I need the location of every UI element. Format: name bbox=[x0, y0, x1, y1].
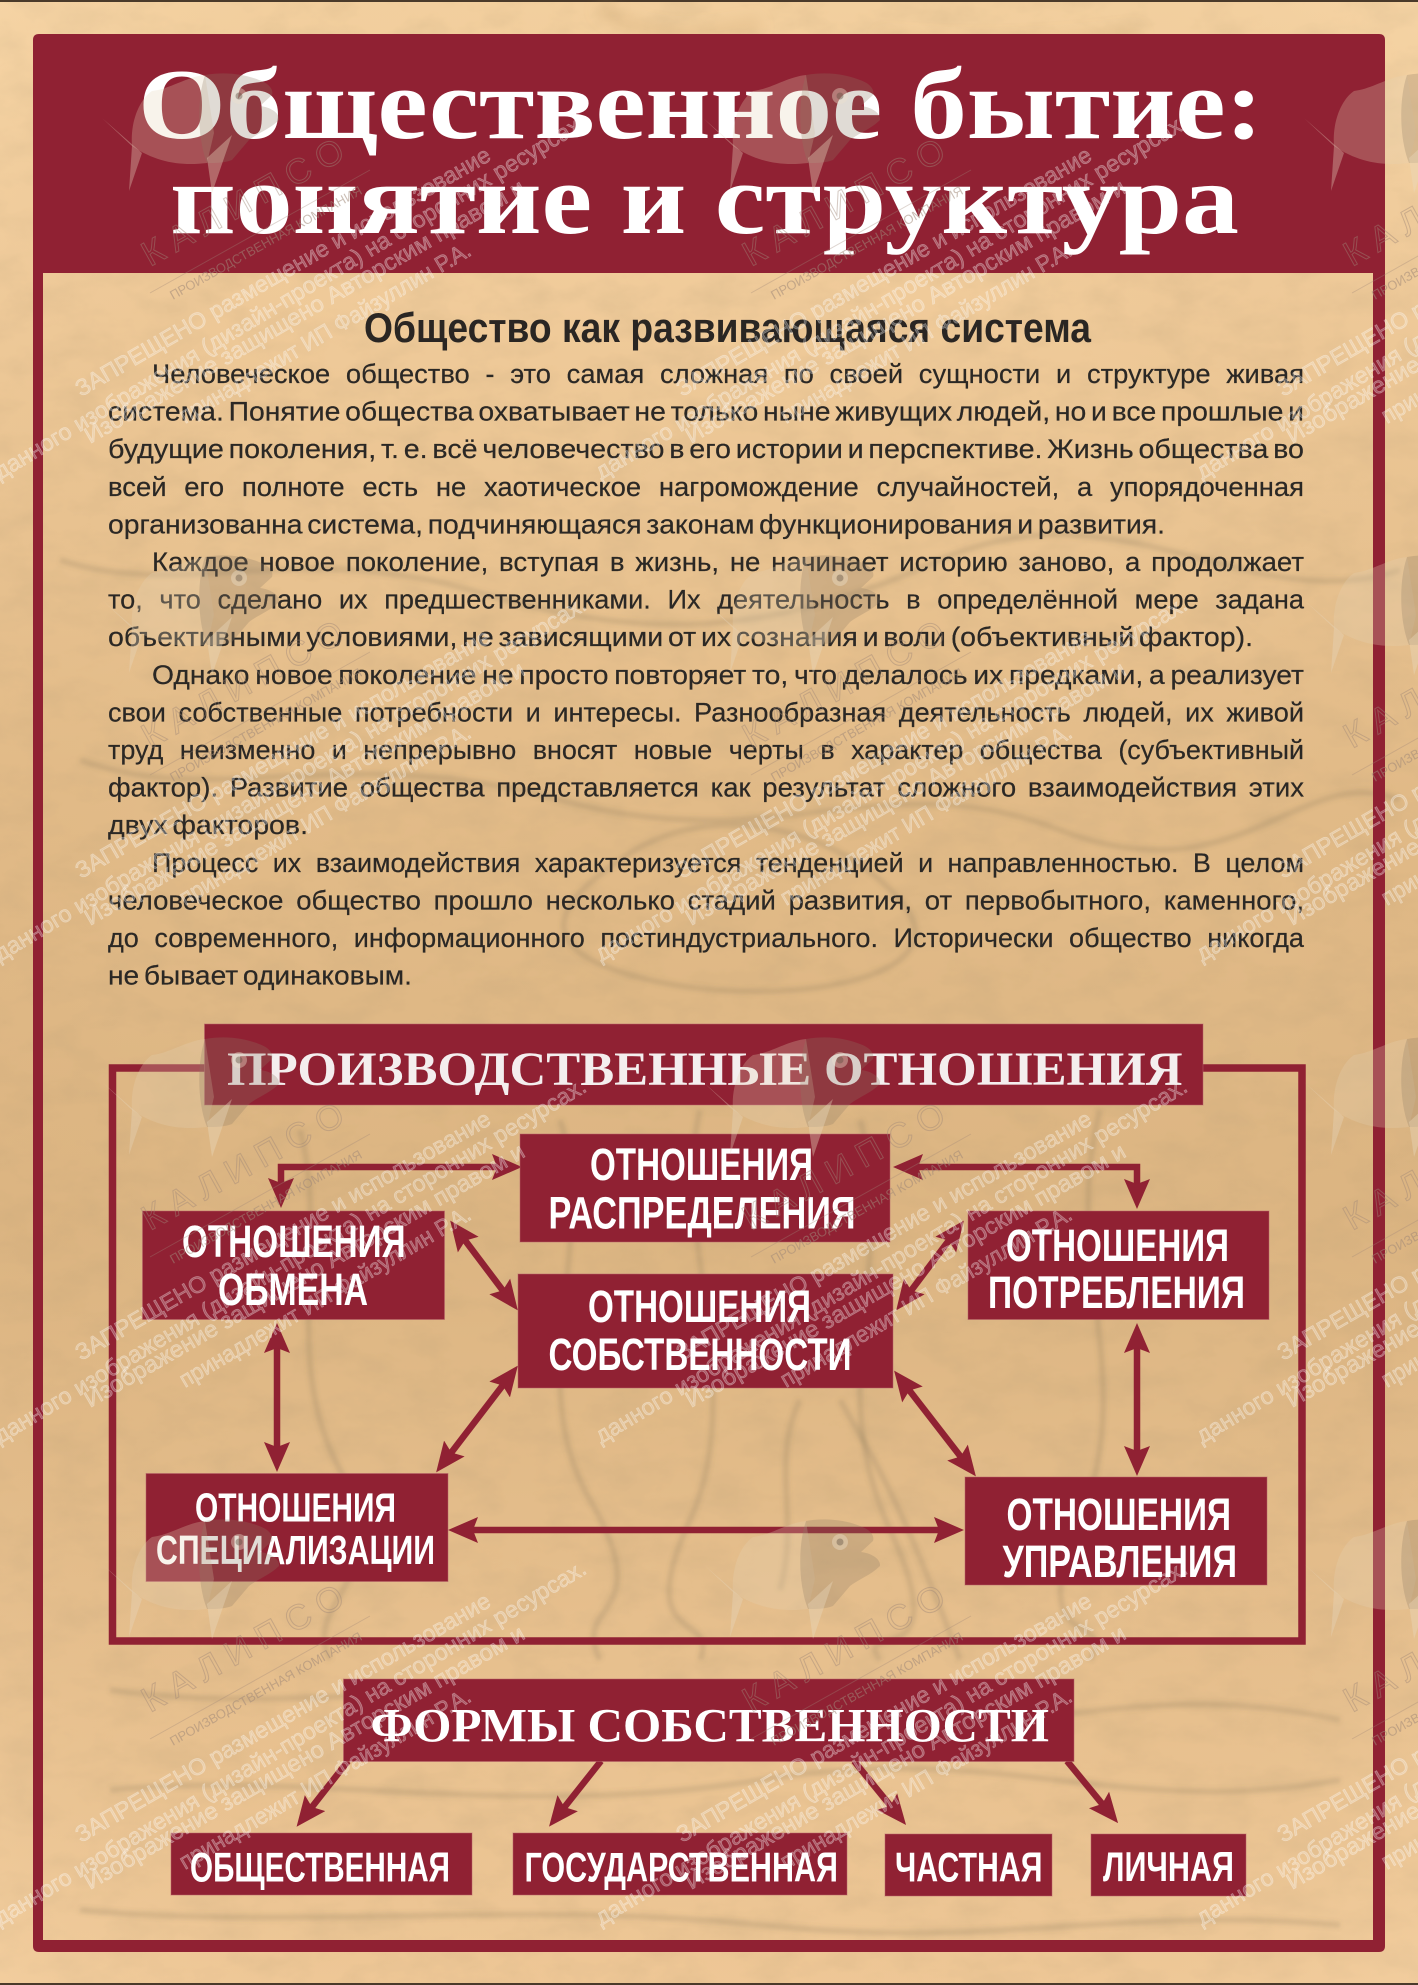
watermark overlay: К А Л И П С О bbox=[736, 613, 952, 756]
box: private: ЧАСТНАЯ bbox=[895, 1844, 1042, 1890]
watermark overlay: данного изображения (дизайн-проекта) на сторонних ресурсах. bbox=[590, 109, 1192, 484]
watermark overlay: данного изображения (дизайн-проекта) на сторонних ресурсах. bbox=[0, 109, 591, 484]
body text: объективными условиями, не зависящими от их сознания и воли (объективный фактор). bbox=[108, 622, 1253, 652]
title: Общественное бытие: bbox=[138, 48, 1263, 160]
title: понятие и структура bbox=[170, 143, 1239, 255]
arrow: consumption to management bbox=[1134, 1331, 1140, 1468]
watermark overlay: К А Л И П С О bbox=[135, 1577, 351, 1720]
watermark overlay: данного изображения (дизайн-проекта) на сторонних ресурсах. bbox=[0, 1073, 591, 1448]
watermark overlay: Изображение защищено Авторским правом и bbox=[680, 1138, 1130, 1412]
arrow: consumption to ownership bbox=[901, 1227, 959, 1304]
watermark overlay: К А Л И П С О bbox=[135, 131, 351, 274]
body text: до современного, информационного постиндустриального. Исторически общество никогда bbox=[108, 923, 1305, 953]
watermark overlay: ПРОИЗВОДСТВЕННАЯ КОМПАНИЯ bbox=[167, 1147, 365, 1267]
box: state: ГОСУДАРСТВЕННАЯ bbox=[524, 1844, 838, 1890]
watermark overlay: ЗАПРЕЩЕНО размещение и использование bbox=[672, 623, 1096, 883]
watermark overlay: принадлежит ИП Файзуллин Р.А. bbox=[775, 236, 1076, 428]
heading: production relations: ПРОИЗВОДСТВЕННЫЕ ОТНОШЕНИЯ bbox=[227, 1043, 1182, 1096]
box: specialization relations: СПЕЦИАЛИЗАЦИИ bbox=[156, 1527, 435, 1573]
heading: production relations bbox=[204, 1024, 1203, 1105]
watermark overlay: принадлежит ИП Файзуллин Р.А. bbox=[775, 1682, 1076, 1874]
watermark overlay: ЗАПРЕЩЕНО размещение и использование bbox=[70, 141, 495, 401]
watermark overlay: К А Л И П С О bbox=[135, 613, 351, 756]
watermark overlay: ПРОИЗВОДСТВЕННАЯ КОМПАНИЯ bbox=[768, 183, 966, 303]
watermark overlay: ПРОИЗВОДСТВЕННАЯ КОМПАНИЯ bbox=[167, 665, 365, 785]
box: consumption relations bbox=[968, 1211, 1269, 1320]
box: specialization relations: ОТНОШЕНИЯ bbox=[195, 1484, 396, 1530]
watermark overlay: принадлежит ИП Файзуллин Р.А. bbox=[775, 1200, 1076, 1392]
box: distribution relations bbox=[520, 1134, 890, 1242]
watermark overlay: ЗАПРЕЩЕНО размещение и использование bbox=[70, 623, 495, 883]
box: distribution relations: РАСПРЕДЕЛЕНИЯ bbox=[548, 1188, 856, 1238]
body text: не бывает одинаковым. bbox=[108, 961, 412, 991]
watermark overlay: принадлежит ИП Файзуллин Р.А. bbox=[174, 718, 475, 910]
box: management relations: ОТНОШЕНИЯ bbox=[1006, 1489, 1231, 1540]
arrow: distribution to consumption bbox=[901, 1167, 1137, 1201]
watermark overlay: принадлежит ИП Файзуллин Р.А. bbox=[174, 1200, 475, 1392]
body text: труд неизменно и непрерывно вносят новые черты в характер общества (субъективный bbox=[108, 735, 1304, 765]
section heading: Общество как развивающаяся система bbox=[364, 304, 1092, 351]
body text: то, что сделано их предшественниками. Их деятельность в определённой мере задана bbox=[108, 585, 1305, 615]
box: consumption relations: ОТНОШЕНИЯ bbox=[1006, 1220, 1229, 1271]
watermark overlay: принадлежит ИП Файзуллин Р.А. bbox=[775, 718, 1076, 910]
watermark overlay: ЗАПРЕЩЕНО размещение и использование bbox=[672, 1105, 1096, 1365]
box: distribution relations: ОТНОШЕНИЯ bbox=[590, 1139, 813, 1190]
body text: всей его полноте есть не хаотическое нагромождение случайностей, а упорядоченная bbox=[108, 472, 1304, 502]
box: management relations: УПРАВЛЕНИЯ bbox=[1002, 1536, 1237, 1587]
watermark overlay: данного изображения (дизайн-проекта) на сторонних ресурсах. bbox=[590, 1073, 1192, 1448]
watermark overlay: ЗАПРЕЩЕНО размещение и использование bbox=[672, 141, 1096, 401]
box: exchange relations bbox=[142, 1211, 444, 1320]
watermark overlay: К А Л И П С О bbox=[736, 1095, 952, 1238]
box: exchange relations: ОБМЕНА bbox=[218, 1264, 368, 1315]
watermark overlay: данного изображения (дизайн-проекта) на сторонних ресурсах. bbox=[590, 591, 1192, 966]
arrow: exchange to ownership bbox=[455, 1227, 513, 1304]
watermark overlay: ЗАПРЕЩЕНО размещение и использование bbox=[672, 1587, 1096, 1847]
box: ownership relations bbox=[518, 1274, 893, 1388]
watermark overlay: данного изображения (дизайн-проекта) на сторонних ресурсах. bbox=[0, 1555, 591, 1930]
body text bbox=[108, 359, 1305, 991]
box: management relations bbox=[965, 1477, 1267, 1587]
watermark overlay: Изображение защищено Авторским правом и bbox=[680, 656, 1130, 930]
box: specialization relations bbox=[146, 1474, 448, 1582]
watermark overlay: данного изображения (дизайн-проекта) на сторонних ресурсах. bbox=[590, 1555, 1192, 1930]
watermark overlay: Изображение защищено Авторским правом и bbox=[80, 656, 529, 930]
watermark overlay: ПРОИЗВОДСТВЕННАЯ КОМПАНИЯ bbox=[167, 1629, 365, 1749]
body text: Каждое новое поколение, вступая в жизнь, не начинает историю заново, а продолжает bbox=[152, 547, 1304, 577]
arrow: forms to public bbox=[302, 1761, 348, 1820]
arrow: ownership to management bbox=[899, 1377, 971, 1470]
watermark overlay: Изображение защищено Авторским правом и bbox=[80, 174, 529, 448]
arrow: specialization to management bbox=[456, 1527, 956, 1533]
arrow: ownership to specialization bbox=[441, 1372, 513, 1466]
box: consumption relations: ПОТРЕБЛЕНИЯ bbox=[988, 1267, 1245, 1318]
watermark overlay: Изображение защищено Авторским правом и bbox=[680, 1620, 1130, 1894]
arrow: distribution to exchange bbox=[281, 1167, 514, 1200]
watermark overlay: принадлежит ИП Файзуллин Р.А. bbox=[174, 236, 475, 428]
box: public: ОБЩЕСТВЕННАЯ bbox=[190, 1844, 450, 1890]
heading: forms of ownership: ФОРМЫ СОБСТВЕННОСТИ bbox=[370, 1700, 1049, 1752]
watermark overlay: Изображение защищено Авторским правом и bbox=[680, 174, 1130, 448]
watermark overlay: данного изображения (дизайн-проекта) на сторонних ресурсах. bbox=[0, 591, 591, 966]
watermark overlay: ПРОИЗВОДСТВЕННАЯ КОМПАНИЯ bbox=[768, 1147, 966, 1267]
body text: двух факторов. bbox=[108, 810, 308, 840]
watermark overlay: Изображение защищено Авторским правом и bbox=[80, 1138, 529, 1412]
body text: фактор). Развитие общества представляется как результат сложного взаимодействия этих bbox=[108, 773, 1304, 803]
body text: свои собственные потребности и интересы. Разнообразная деятельность людей, их живой bbox=[108, 697, 1304, 727]
panel: production relations frame bbox=[112, 1068, 1302, 1641]
box: exchange relations: ОТНОШЕНИЯ bbox=[182, 1216, 406, 1267]
arrow: forms to state bbox=[554, 1761, 601, 1820]
arrow: forms to personal bbox=[1067, 1761, 1113, 1817]
body text: человеческое общество прошло несколько стадий развития, от первобытного, каменного, bbox=[108, 885, 1304, 915]
watermark overlay: Изображение защищено Авторским правом и bbox=[80, 1620, 529, 1894]
body text: будущие поколения, т. е. всё человечество в его истории и перспективе. Жизнь общества во bbox=[108, 434, 1304, 464]
watermark overlay: К А Л И П С О bbox=[736, 131, 952, 274]
body text: Человеческое общество - это самая сложная по своей сущности и структуре живая bbox=[152, 359, 1304, 389]
box: private bbox=[885, 1834, 1052, 1896]
box: public bbox=[171, 1833, 472, 1895]
body text: Однако новое поколение не просто повторяет то, что делалось их предками, а реализует bbox=[152, 660, 1304, 690]
box: ownership relations: СОБСТВЕННОСТИ bbox=[548, 1329, 852, 1380]
body text: Процесс их взаимодействия характеризуется тенденцией и направленностью. В целом bbox=[152, 848, 1304, 878]
body text: организованна система, подчиняющаяся законам функционирования и развития. bbox=[108, 509, 1165, 539]
box: state bbox=[513, 1833, 847, 1895]
arrow: forms to private bbox=[854, 1761, 901, 1819]
heading: forms of ownership bbox=[344, 1679, 1074, 1762]
watermark overlay: ЗАПРЕЩЕНО размещение и использование bbox=[70, 1587, 495, 1847]
watermark overlay: ПРОИЗВОДСТВЕННАЯ КОМПАНИЯ bbox=[768, 665, 966, 785]
arrow: exchange to specialization bbox=[274, 1331, 280, 1464]
title bbox=[138, 48, 1263, 255]
watermark overlay: ПРОИЗВОДСТВЕННАЯ КОМПАНИЯ bbox=[167, 183, 365, 303]
box: personal: ЛИЧНАЯ bbox=[1103, 1843, 1234, 1890]
box: personal bbox=[1091, 1834, 1246, 1896]
box: ownership relations: ОТНОШЕНИЯ bbox=[588, 1281, 811, 1332]
body text: система. Понятие общества охватывает не только ныне живущих людей, но и все прошлые и bbox=[108, 397, 1304, 427]
watermark overlay: ПРОИЗВОДСТВЕННАЯ КОМПАНИЯ bbox=[768, 1629, 966, 1749]
watermark overlay: принадлежит ИП Файзуллин Р.А. bbox=[174, 1682, 475, 1874]
watermark overlay: К А Л И П С О bbox=[736, 1577, 952, 1720]
watermark overlay: К А Л И П С О bbox=[135, 1095, 351, 1238]
watermark overlay: ЗАПРЕЩЕНО размещение и использование bbox=[70, 1105, 495, 1365]
